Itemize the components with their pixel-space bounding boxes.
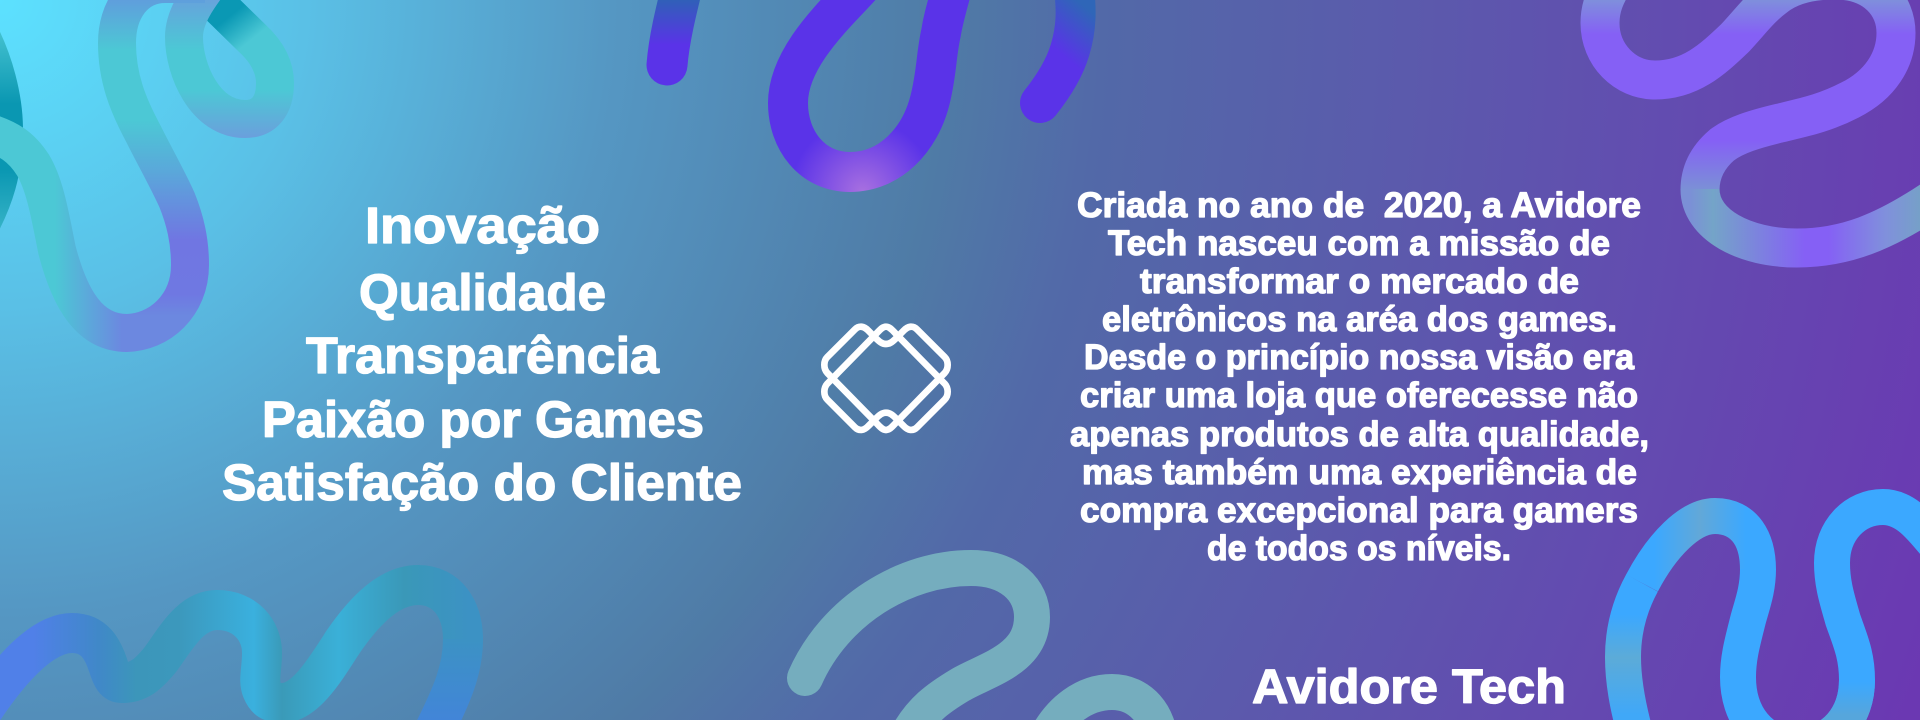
values list: Satisfação do Cliente <box>222 454 742 511</box>
squiggle: bottom right <box>1623 507 1920 720</box>
about paragraph: mas também uma experiência de <box>1082 453 1637 492</box>
squiggle: top left <box>0 0 275 333</box>
values list: Qualidade <box>359 264 606 321</box>
about paragraph <box>1070 186 1649 568</box>
icon: interlaced diamond logo <box>824 327 948 430</box>
about paragraph: apenas produtos de alta qualidade, <box>1070 415 1649 454</box>
squiggle: top right <box>1600 0 1920 248</box>
squiggle: top centre <box>667 0 1076 172</box>
squiggle: bottom centre <box>805 568 1160 720</box>
about paragraph: de todos os níveis. <box>1207 529 1511 568</box>
values list: Inovação <box>365 197 600 254</box>
about paragraph: transformar o mercado de <box>1140 262 1579 301</box>
about paragraph: eletrônicos na aréa dos games. <box>1102 300 1617 339</box>
values list <box>222 197 742 511</box>
values list: Paixão por Games <box>262 391 704 448</box>
about paragraph: compra excepcional para gamers <box>1080 491 1638 530</box>
about paragraph: criar uma loja que oferecesse não <box>1080 376 1638 415</box>
brand name: Avidore Tech <box>1252 661 1566 714</box>
squiggle: bottom left <box>0 585 463 720</box>
about paragraph: Tech nasceu com a missão de <box>1108 224 1610 263</box>
values list: Transparência <box>306 327 660 384</box>
about paragraph: Desde o princípio nossa visão era <box>1084 338 1635 377</box>
about paragraph: Criada no ano de 2020, a Avidore <box>1077 186 1641 225</box>
